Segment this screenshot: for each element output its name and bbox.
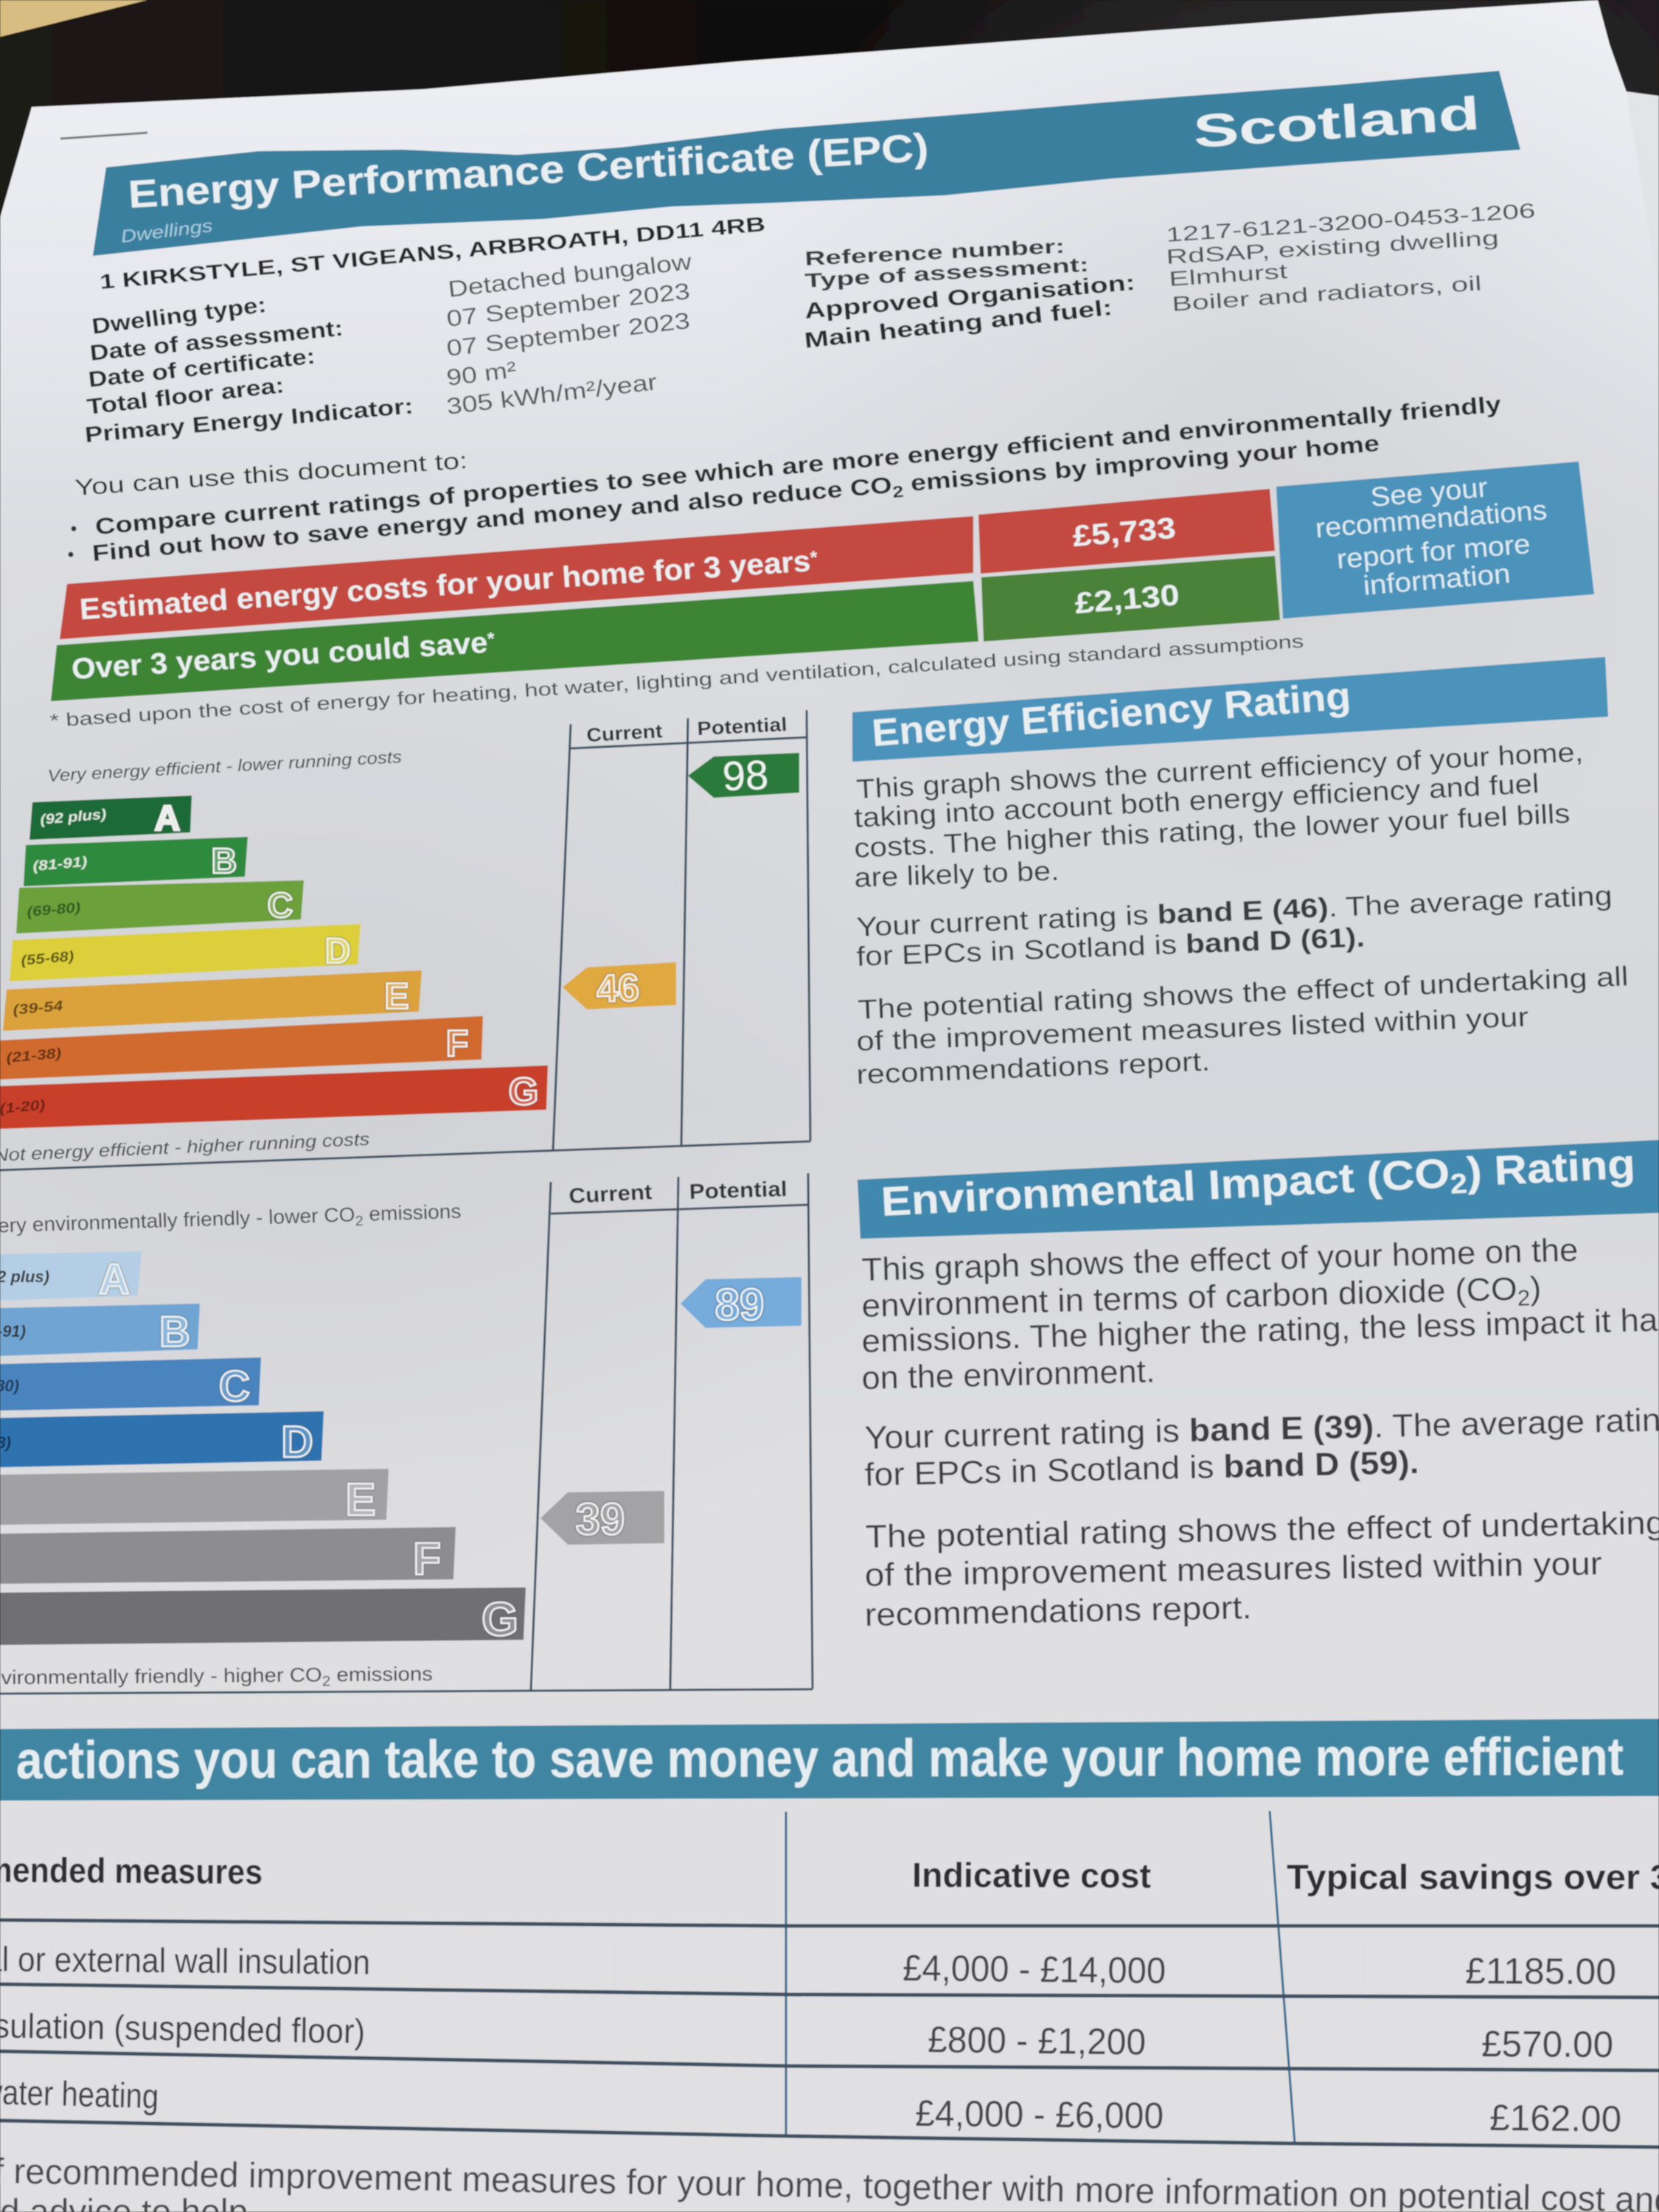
- band E: E: [345, 1475, 376, 1526]
- chart: environmental impact rating: emissions: [330, 1663, 433, 1686]
- property details: left column: [84, 248, 693, 448]
- current marker 39: 39: [576, 1495, 625, 1544]
- text block: environmental impact explanation: recommendations report.: [864, 1590, 1252, 1633]
- table: recommended measures: Typical savings over 3: [1287, 1857, 1659, 1896]
- band A: (92 plus): [40, 807, 107, 828]
- band G: G: [481, 1593, 518, 1646]
- uses of this document: emissions by improving your home: [902, 430, 1380, 497]
- property details: right column: Main heating and fuel:: [803, 296, 1113, 353]
- property details: right column: Elmhurst: [1168, 260, 1288, 291]
- text block: environmental impact explanation: on the environment.: [861, 1353, 1155, 1397]
- table: recommended measures: [0, 1811, 1659, 2147]
- heading: environmental impact rating: ) Rating: [1466, 1140, 1636, 1195]
- address: 1 KIRKSTYLE, ST VIGEANS, ARBROATH, DD11 4RB: [99, 212, 766, 293]
- band C: C: [268, 886, 293, 925]
- small mark at top of page: [60, 133, 147, 139]
- table: recommended measures: £570.00: [1481, 2023, 1613, 2065]
- callout: see your recommendations: recommendations: [1314, 495, 1548, 543]
- band A: [0, 1251, 142, 1304]
- property details: left column: Primary Energy Indicator:: [84, 394, 414, 448]
- chart: environmental impact rating: Potential: [689, 1178, 787, 1204]
- band D: [0, 1411, 324, 1467]
- chart: energy efficiency rating: Potential: [697, 713, 787, 740]
- footnote: * based upon the cost of energy for heating, hot water, lighting and ventilation, calculated using standard assumptions: [49, 631, 1304, 731]
- table: recommended measures: Indicative cost: [912, 1855, 1151, 1895]
- panel: estimated energy costs: Over 3 years you could save: [71, 627, 470, 686]
- property details: left column: 07 September 2023: [445, 307, 692, 361]
- title: Energy Performance Certificate (EPC): [127, 126, 930, 217]
- band E: [3, 970, 422, 1031]
- dwellings label: Dwellings: [119, 216, 214, 247]
- property details: left column: Date of assessment:: [88, 316, 344, 366]
- band B: B: [212, 842, 237, 881]
- property details: left column: Date of certificate:: [87, 344, 316, 392]
- band B: [24, 837, 248, 886]
- text block: environmental impact explanation: The potential rating shows the effect of undertaking all: [865, 1504, 1659, 1555]
- panel: estimated energy costs: *: [810, 548, 818, 568]
- text block: energy efficiency explanation: taking into account both energy efficiency and fuel: [853, 768, 1540, 833]
- band E: E: [384, 975, 409, 1017]
- band G: (1-20): [0, 1098, 46, 1117]
- panel: estimated energy costs: [51, 489, 1280, 701]
- property details: left column: Detached bungalow: [447, 248, 693, 302]
- text block: energy efficiency explanation: [853, 737, 1629, 1090]
- property details: right column: RdSAP, existing dwelling: [1166, 226, 1500, 268]
- paper shading: chart area: [0, 516, 900, 1696]
- callout: see your recommendations: [1276, 462, 1594, 619]
- header banner: [93, 71, 1520, 256]
- band E: (39-54: [13, 998, 64, 1018]
- panel: estimated energy costs: Estimated energy costs for your home for 3 years: [79, 548, 774, 626]
- uses of this document: [68, 391, 1503, 570]
- band F: F: [446, 1023, 468, 1064]
- chart: environmental impact rating: emissions: [363, 1200, 462, 1225]
- property details: left column: 07 September 2023: [445, 278, 692, 332]
- chart: energy efficiency rating: [0, 710, 810, 1170]
- band G: [0, 1065, 548, 1129]
- chart: energy efficiency rating: Not energy efficient - higher running costs: [0, 1130, 370, 1166]
- paper shading: upper right: [723, 0, 1659, 914]
- table: recommended measures: £4,000 - £14,000: [902, 1947, 1166, 1992]
- band A: [29, 796, 192, 840]
- heading: environmental impact rating: [858, 1140, 1659, 1239]
- uses of this document: Compare current ratings of properties to see which are more energy efficient and environmentally friendly: [94, 391, 1503, 540]
- band B: (81-91): [32, 855, 88, 874]
- band F: F: [413, 1534, 441, 1585]
- chart: environmental impact rating: [0, 1173, 813, 1694]
- property details: left column: Total floor area:: [86, 373, 285, 420]
- band C: C: [219, 1363, 250, 1411]
- band D: (55-68): [21, 949, 74, 969]
- chart: energy efficiency rating: Current: [586, 720, 664, 746]
- band A: A: [99, 1256, 130, 1304]
- heading: energy efficiency rating: Energy Efficiency Rating: [870, 675, 1352, 755]
- band F: (21-38): [6, 1046, 62, 1066]
- text block: environmental impact explanation: for EPCs in Scotland is band D (59).: [864, 1444, 1419, 1493]
- property details: right column: 1217-6121-3200-0453-1206: [1165, 199, 1536, 246]
- uses of this document: Find out how to save energy and money and also reduce CO: [91, 484, 748, 566]
- band D: D: [281, 1417, 313, 1467]
- potential marker 89: [681, 1277, 801, 1329]
- property details: right column: Boiler and radiators, oil: [1171, 271, 1482, 316]
- text block: energy efficiency explanation: The potential rating shows the effect of undertaking all: [858, 961, 1629, 1025]
- callout: see your recommendations: report for more: [1335, 529, 1531, 574]
- current marker 46: [563, 962, 676, 1011]
- band C: [16, 880, 304, 933]
- property details: left column: Dwelling type:: [91, 293, 268, 339]
- table: recommended measures: £4,000 - £6,000: [915, 2093, 1164, 2137]
- uses of this document: 2: [891, 482, 904, 501]
- text block: energy efficiency explanation: of the improvement measures listed within your: [856, 1002, 1529, 1057]
- band D: D: [325, 932, 350, 971]
- text block: energy efficiency explanation: recommendations report.: [856, 1046, 1211, 1090]
- band A: A: [155, 799, 180, 838]
- potential marker 89: 89: [715, 1280, 764, 1329]
- country label: Scotland: [1192, 88, 1481, 158]
- band G: [0, 1587, 526, 1646]
- current marker 46: 46: [596, 967, 640, 1011]
- band C: (69-80): [27, 900, 81, 920]
- chart: energy efficiency rating: Very energy efficient - lower running costs: [47, 747, 403, 785]
- chart: environmental impact rating: 2: [355, 1214, 364, 1229]
- text block: environmental impact explanation: emissions. The higher the rating, the less impact it has: [861, 1301, 1659, 1360]
- heading: energy efficiency rating: [852, 657, 1608, 762]
- chart: environmental impact rating: Current: [568, 1180, 653, 1208]
- property details: left column: 90 m²: [445, 357, 518, 391]
- band C: [0, 1357, 261, 1411]
- text block: energy efficiency explanation: costs. The higher this rating, the lower your fuel bills: [853, 799, 1571, 863]
- photo background: tan corner: [0, 0, 147, 37]
- property details: right column: Approved Organisation:: [804, 271, 1136, 324]
- text block: environmental impact explanation: Your current rating is band E (39) . The average rating: [864, 1402, 1659, 1456]
- text block: energy efficiency explanation: are likely to be.: [854, 855, 1060, 893]
- property details: right column: Reference number:: [804, 235, 1065, 270]
- panel: estimated energy costs: £5,733: [1071, 512, 1177, 553]
- sheet of paper behind: [1548, 91, 1659, 2212]
- band D: [10, 924, 361, 981]
- band B: [0, 1304, 200, 1356]
- potential marker 98: [688, 751, 799, 799]
- potential marker 98: 98: [722, 751, 769, 799]
- text block: energy efficiency explanation: Your current rating is band E (46) . The average rating: [856, 880, 1613, 942]
- panel: estimated energy costs: *: [487, 629, 495, 650]
- uses of this document: You can use this document to:: [74, 448, 468, 501]
- table: recommended measures: £162.00: [1489, 2097, 1621, 2140]
- property details: right column: [803, 199, 1536, 353]
- text block: environmental impact explanation: ): [1529, 1270, 1542, 1307]
- panel: estimated energy costs: £2,130: [1074, 579, 1180, 620]
- property details: right column: Type of assessment:: [804, 254, 1090, 292]
- callout: see your recommendations: information: [1362, 558, 1512, 601]
- current marker 39: [540, 1491, 664, 1545]
- text block: energy efficiency explanation: for EPCs in Scotland is band D (61).: [856, 922, 1366, 972]
- text block: environmental impact explanation: of the improvement measures listed within your: [864, 1545, 1602, 1593]
- band G: G: [509, 1071, 538, 1113]
- band F: [0, 1016, 483, 1079]
- band B: B: [159, 1308, 190, 1356]
- callout: see your recommendations: See your: [1369, 472, 1489, 512]
- band E: [0, 1469, 389, 1526]
- heading: environmental impact rating: Environmental Impact (CO: [880, 1152, 1400, 1225]
- chart: environmental impact rating: 2: [322, 1674, 330, 1689]
- text block: energy efficiency explanation: This graph shows the current efficiency of your home,: [855, 737, 1584, 804]
- property details: left column: 305 kWh/m²/year: [445, 369, 658, 420]
- text block: environmental impact explanation: [861, 1232, 1659, 1633]
- text block: environmental impact explanation: This graph shows the effect of your home on the: [861, 1232, 1579, 1288]
- table: recommended measures: £800 - £1,200: [928, 2019, 1147, 2063]
- band F: [0, 1527, 456, 1585]
- text block: environmental impact explanation: environment in terms of carbon dioxide (CO: [861, 1272, 1489, 1324]
- text block: environmental impact explanation: 2: [1517, 1286, 1531, 1311]
- table: recommended measures: £1185.00: [1465, 1950, 1616, 1992]
- heading: environmental impact rating: 2: [1450, 1169, 1468, 1200]
